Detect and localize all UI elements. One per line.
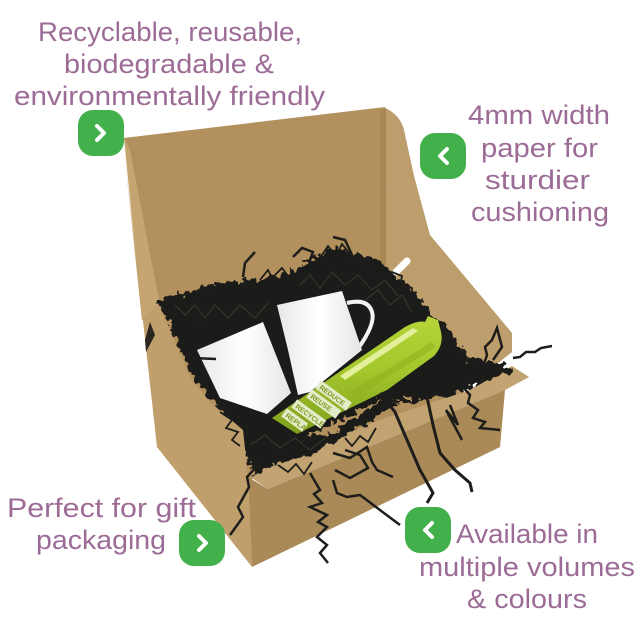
bottle labels	[281, 380, 352, 432]
callout: 4mm width text: 4mm width	[468, 100, 610, 130]
callout: recyclable text	[14, 17, 326, 111]
callout: gift packaging text: packaging	[36, 525, 166, 555]
box left side panel	[124, 150, 252, 567]
box front panel	[248, 390, 505, 567]
callout: 4mm width text: cushioning	[471, 197, 609, 227]
bottle labels: REUSE	[309, 394, 333, 414]
callout: volumes and colours text: multiple volumes	[419, 552, 635, 582]
shredded paper filling in front	[212, 360, 515, 476]
icon: right arrow button bottom	[179, 520, 225, 566]
box front flap	[246, 366, 529, 489]
green bottle	[272, 316, 442, 434]
callout: recyclable text: biodegradable &	[64, 49, 274, 79]
icon: left arrow button bottom	[405, 507, 451, 553]
pen	[396, 261, 407, 272]
callout: recyclable text: environmentally friendly	[14, 81, 326, 111]
callout: volumes and colours text: & colours	[467, 584, 587, 614]
callout: volumes and colours text	[419, 519, 635, 614]
loose paper shreds	[170, 237, 552, 563]
box back and inside panel	[124, 107, 512, 480]
callout: 4mm width text: sturdier	[485, 165, 590, 195]
shredded paper filling behind items	[158, 247, 505, 468]
cardboard gift box with contents	[124, 107, 552, 567]
bottle labels: REDUCE	[318, 385, 346, 408]
icon: left arrow button right	[420, 133, 466, 179]
callout: recyclable text: Recyclable, reusable,	[38, 17, 302, 47]
callout: 4mm width text	[468, 100, 610, 227]
callout: gift packaging text: Perfect for gift	[7, 493, 197, 523]
mug right	[277, 291, 373, 395]
callout: volumes and colours text: Available in	[456, 519, 598, 549]
callout: 4mm width text: paper for	[481, 133, 598, 163]
mug left	[197, 322, 291, 414]
bottle labels: REPLA	[284, 413, 307, 432]
callout: gift packaging text	[7, 493, 197, 555]
side notch	[145, 322, 155, 352]
bottle labels: RECYCLE	[294, 404, 325, 429]
icon: right arrow button top	[78, 110, 124, 156]
